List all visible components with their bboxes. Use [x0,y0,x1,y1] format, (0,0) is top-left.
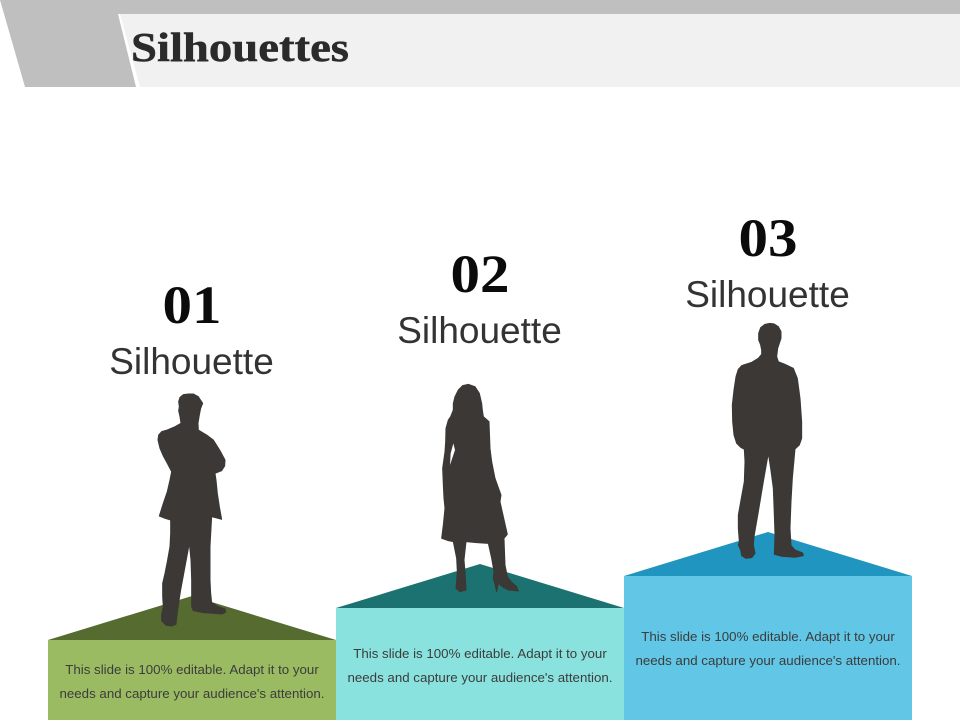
base: 02 [336,608,624,720]
text: 01 description [60,662,324,701]
text: 03 description: needs and capture your audience's attention. [636,653,900,668]
text: 02 description [348,646,612,685]
panel: 01 green [48,596,336,720]
number 01: 01 [162,275,222,335]
text: 03 description: This slide is 100% editable. Adapt it to your [641,629,895,644]
number 02: 02 [450,244,510,304]
panel: 03 blue [624,532,912,720]
text: 02 description: This slide is 100% editable. Adapt it to your [353,646,607,661]
heading: Silhouette 03: Silhouette [685,274,850,315]
panel: 02 teal [336,564,624,720]
roof: 01 [48,596,336,640]
text: 02 description: needs and capture your audience's attention. [348,670,612,685]
header band [0,0,960,87]
icon: man with crossed arms [158,394,226,626]
roof: 03 [624,532,912,576]
number 03: 03 [738,208,798,268]
text: 03 description [636,629,900,668]
heading: Silhouette 02: Silhouette [397,310,562,351]
text: 01 description: needs and capture your audience's attention. [60,686,324,701]
icon: woman in dress [442,384,518,592]
roof: 02 [336,564,624,608]
base: 01 [48,640,336,720]
heading: Silhouette 01: Silhouette [109,341,274,382]
base: 03 [624,576,912,720]
icon: man standing [732,323,803,558]
title: Silhouettes [131,24,349,70]
text: 01 description: This slide is 100% editable. Adapt it to your [65,662,319,677]
